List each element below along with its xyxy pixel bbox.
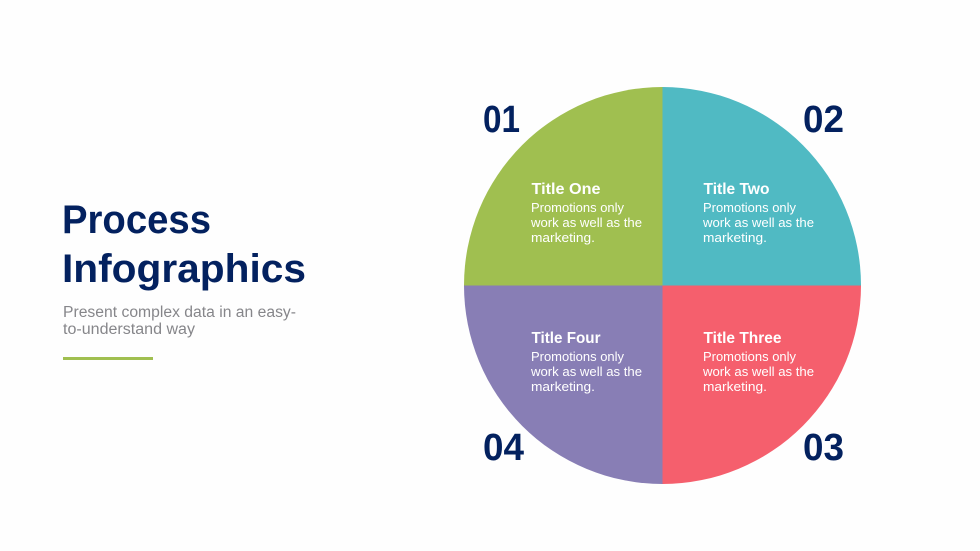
- subtitle: Present complex data in an easy-: [63, 304, 296, 321]
- segment 03: red: [662, 286, 861, 484]
- accent line: [63, 357, 153, 360]
- segment 04: purple: [464, 286, 662, 484]
- title: Infographics: [62, 247, 306, 291]
- number 04: 04: [483, 427, 524, 469]
- label: title two: work as well as the: [702, 215, 814, 230]
- label: title two: Title Two: [704, 181, 770, 198]
- label: title three: marketing.: [703, 379, 767, 394]
- title: [62, 198, 306, 291]
- title: Process: [62, 198, 211, 242]
- label: title one: work as well as the: [530, 215, 642, 230]
- label: title three: Title Three: [704, 330, 782, 347]
- label: title one: Title One: [532, 181, 601, 198]
- label: title three: work as well as the: [702, 364, 814, 379]
- label: title two: [702, 181, 814, 245]
- segment 01: green: [464, 87, 662, 286]
- number 03: 03: [803, 427, 844, 469]
- circle chart: [464, 87, 861, 484]
- label: title two: Promotions only: [703, 200, 796, 215]
- number 02: 02: [803, 99, 844, 141]
- label: title four: Title Four: [532, 330, 600, 347]
- label: title one: Promotions only: [531, 200, 624, 215]
- label: title three: [702, 330, 814, 394]
- label: title one: marketing.: [531, 230, 595, 245]
- subtitle: to-understand way: [63, 321, 195, 338]
- label: title four: marketing.: [531, 379, 595, 394]
- label: title one: [530, 181, 642, 245]
- label: title four: Promotions only: [531, 349, 624, 364]
- segment 02: teal: [662, 87, 861, 286]
- subtitle: [63, 304, 296, 338]
- number 01: 01: [483, 99, 520, 141]
- label: title four: [530, 330, 642, 394]
- label: title four: work as well as the: [530, 364, 642, 379]
- label: title three: Promotions only: [703, 349, 796, 364]
- label: title two: marketing.: [703, 230, 767, 245]
